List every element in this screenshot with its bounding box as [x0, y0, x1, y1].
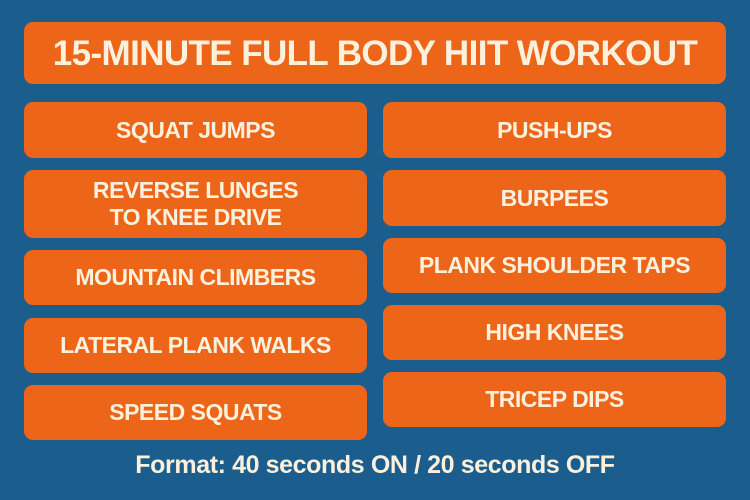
exercise: speed squats [24, 385, 367, 440]
title: 15-MINUTE FULL BODY HIIT WORKOUT [53, 34, 697, 72]
title [24, 22, 726, 84]
exercise: mountain climbers [24, 250, 367, 305]
exercise: push-ups [383, 102, 726, 158]
exercise: squat jumps [24, 102, 367, 158]
exercise: mountain climbers: MOUNTAIN CLIMBERS [75, 264, 316, 290]
exercise: high knees [383, 305, 726, 360]
exercise: speed squats: SPEED SQUATS [109, 399, 282, 425]
exercise: reverse lunges: REVERSE LUNGES [93, 177, 298, 203]
exercise: tricep dips [383, 372, 726, 427]
exercise: plank shoulder taps: PLANK SHOULDER TAPS [419, 252, 690, 278]
exercise: burpees [383, 170, 726, 226]
exercise: plank shoulder taps [383, 238, 726, 293]
exercise: lateral plank walks [24, 318, 367, 373]
exercise: reverse lunges: TO KNEE DRIVE [110, 204, 282, 230]
exercise: squat jumps: SQUAT JUMPS [116, 116, 275, 142]
exercise: burpees: BURPEES [501, 184, 608, 210]
exercise: tricep dips: TRICEP DIPS [485, 386, 624, 412]
footer format text: Format: 40 seconds ON / 20 seconds OFF [135, 451, 615, 479]
exercise: lateral plank walks: LATERAL PLANK WALKS [60, 332, 331, 358]
exercise: high knees: HIGH KNEES [485, 319, 624, 345]
exercise: reverse lunges [24, 170, 367, 238]
exercise: push-ups: PUSH-UPS [497, 116, 612, 142]
